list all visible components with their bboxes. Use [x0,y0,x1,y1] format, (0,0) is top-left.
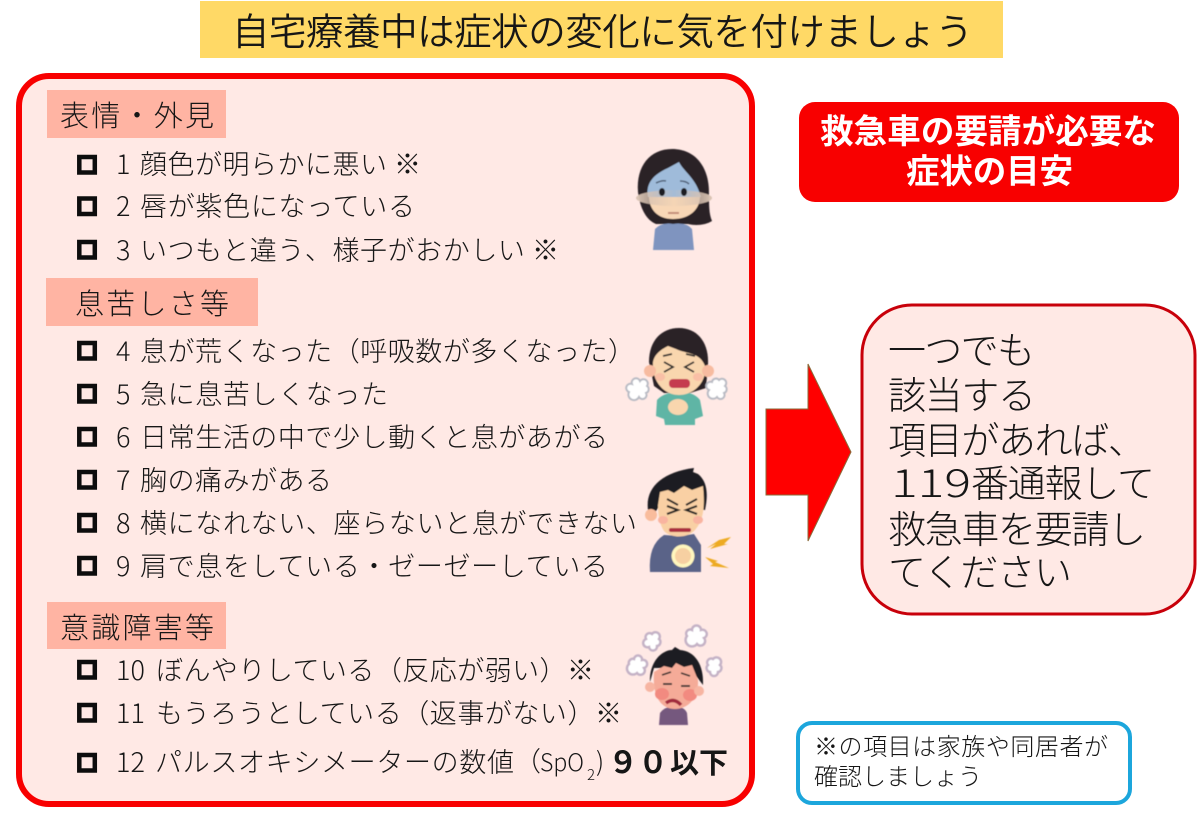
checklist item 9: 9 [116,545,130,584]
callout: call 119: 119 [891,453,971,508]
heading: impaired consciousness [47,602,226,649]
callout: call 119: 番通報して [971,453,1155,508]
heading: shortness of breath: 息苦しさ等 [75,288,229,321]
checklist item 10: 10 [116,649,145,688]
heading: impaired consciousness: 意識障害等 [60,612,214,645]
checklist item 1: 顔色が明らかに悪い ※ [140,143,421,182]
checklist item 9: 肩で息をしている・ゼーゼーしている [140,545,608,584]
checklist item 12: パルスオキシメーターの数値 [155,741,514,780]
icon: dizzy man [627,626,721,725]
title: 自宅療養中は症状の変化に気を付けましょう [232,11,973,53]
checklist item 5: 5 [116,373,130,412]
note box: 確認しましょう [814,764,982,791]
checklist item 3: いつもと違う、様子がおかしい ※ [140,229,559,268]
checklist item 2: 唇が紫色になっている [140,185,415,224]
icon: man with chest pain [645,468,731,572]
checklist item 1: 1 [116,143,130,182]
checklist item 11: もうろうとしている（返事がない）※ [156,692,622,731]
checklist item 12: SpO [540,743,584,778]
checklist item 12: （ [514,740,541,779]
checklist item 10: ぼんやりしている（反応が弱い）※ [156,649,594,688]
checklist item 7: 7 [116,459,130,498]
callout: call 119: 一つでも [888,320,1035,375]
heading: shortness of breath [46,278,258,326]
checklist item 7: 胸の痛みがある [140,459,332,498]
panel: symptom checklist [19,76,752,804]
icon: pale woman [636,149,712,250]
checklist item 8: 横になれない、座らないと息ができない [140,502,637,541]
red banner: ambulance guideline: 救急車の要請が必要な [820,113,1156,151]
checklist item 11: 11 [116,692,145,731]
callout: call 119: 救急車を要請し [888,499,1146,554]
note box: ※の項目は家族や同居者が [814,734,1108,761]
checklist item 6: 日常生活の中で少し動くと息があがる [140,416,608,455]
callout: call 119: てください [888,542,1072,597]
checklist item 12: 2 [587,764,595,785]
title [200,1,1003,58]
checklist item 12: 12 [116,741,145,780]
callout: call 119 [862,305,1195,614]
checklist item 8: 8 [116,502,130,541]
checklist item 12: 以下 [670,748,728,780]
checklist item 12 [79,740,728,785]
checklist item 4: 4 [116,330,130,369]
red banner: ambulance guideline: 症状の目安 [906,154,1073,191]
checklist item 6: 6 [116,416,130,455]
note box [798,723,1130,803]
checklist item 3: 3 [116,229,130,268]
heading: facial expression and appearance: 表情・外見 [60,100,214,133]
callout: call 119: 該当する [888,365,1036,420]
checklist item 2: 2 [116,185,130,224]
icon: breathless woman [626,328,727,425]
checklist item 4: 息が荒くなった（呼吸数が多くなった） [140,330,635,369]
arrow [766,364,851,541]
red banner: ambulance guideline [799,102,1179,202]
heading: facial expression and appearance [47,90,226,138]
checklist item 12: ９０ [608,747,668,780]
callout: call 119: 項目があれば、 [888,410,1146,465]
checklist item 12: ) [596,742,604,779]
checklist item 5: 急に息苦しくなった [140,373,388,412]
